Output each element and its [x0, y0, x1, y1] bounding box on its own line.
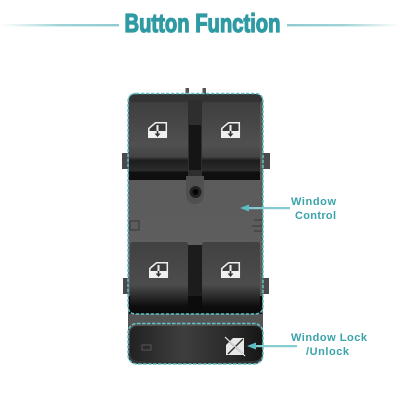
window switch panel [122, 88, 270, 364]
connector pins [186, 88, 206, 94]
title: Button Function [124, 8, 280, 38]
highlight: window control outline [128, 94, 263, 314]
icon: door top right [221, 123, 240, 138]
top right button [202, 102, 260, 180]
label: window lock: Window Lock [291, 332, 368, 344]
small lock indicator [142, 345, 151, 350]
label: window control: Window [291, 196, 336, 208]
plate notches [130, 220, 262, 231]
icon: door bottom right [221, 263, 240, 278]
side clips [122, 153, 270, 294]
label: window lock [291, 332, 368, 358]
top left button [129, 102, 188, 180]
lock button [130, 326, 262, 362]
bottom left button [130, 242, 188, 313]
icon: door bottom left [149, 263, 168, 278]
arrow: window control [240, 204, 290, 212]
switch body [128, 94, 263, 364]
bottom right button [202, 242, 260, 313]
icon: door top left [148, 123, 167, 138]
centre screw mount [186, 176, 204, 204]
label: window control: Control [295, 210, 336, 222]
icon: window lock [225, 337, 245, 356]
label: window control [291, 196, 336, 222]
label: window lock: /Unlock [306, 346, 350, 358]
highlight: lock outline [128, 324, 263, 364]
arrow: window lock [247, 342, 297, 350]
